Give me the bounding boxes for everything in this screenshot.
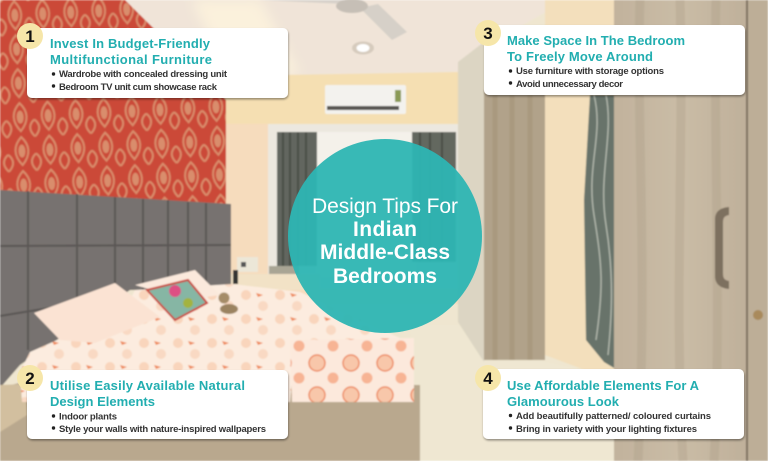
card 2: natural design elements: [17, 365, 288, 439]
ceiling: [125, 0, 567, 100]
bullets 1: Bedroom TV unit cum showcase rack: [59, 82, 218, 93]
number badge 4: 4: [483, 369, 493, 388]
window sill: [269, 266, 299, 274]
white wardrobe side: [458, 42, 484, 362]
large wardrobe door: [614, 0, 747, 461]
ceiling fan: [258, 0, 407, 40]
decorative cushion: [147, 280, 207, 320]
bullets 3: Avoid unnecessary decor: [516, 79, 623, 90]
wardrobe handle: [715, 207, 729, 289]
heading 4: Glamourous Look: [507, 394, 620, 409]
bed base: [0, 380, 420, 461]
bullets 1: Wardrobe with concealed dressing unit: [59, 69, 228, 80]
bullets 2: Indoor plants: [59, 412, 117, 422]
patterned curtain: [584, 95, 614, 368]
card 3: make space: [475, 20, 745, 95]
bullets 4: [509, 411, 711, 435]
bedside table: [0, 384, 27, 432]
heading 3: Make Space In The Bedroom: [507, 33, 685, 48]
left curtain: [277, 132, 317, 266]
ceiling cove light: [192, 0, 300, 75]
heading 4: Use Affordable Elements For A: [507, 378, 700, 393]
number badge 4: [475, 365, 501, 391]
wood wardrobe panel: [484, 90, 545, 360]
card 1: multifunctional furniture: [17, 23, 288, 98]
window sheer: [316, 132, 416, 277]
bullets 2: Style your walls with nature-inspired wallpapers: [59, 424, 266, 435]
heading 2: Utilise Easily Available Natural: [50, 378, 245, 393]
downlight: [352, 42, 374, 54]
heading 2: [50, 378, 245, 409]
air conditioner: [325, 85, 406, 114]
number badge 2: [17, 365, 43, 391]
wall niche: [545, 0, 615, 372]
bed foot panel: [290, 338, 414, 402]
bed pillow: [34, 283, 160, 343]
bullets 4: Add beautifully patterned/ coloured curtains: [516, 411, 711, 422]
teddy bear: [218, 292, 238, 314]
number badge 1: [17, 23, 43, 49]
bullets 2: [52, 412, 266, 435]
red damask wallpaper: [0, 0, 226, 210]
heading 3: To Freely Move Around: [507, 49, 653, 64]
back pillow: [135, 270, 220, 300]
floor: [410, 325, 614, 461]
number badge 1: 1: [25, 27, 35, 46]
centre title circle: Middle-Class: [320, 241, 450, 264]
bed sheet: [20, 284, 415, 402]
heading 1: Invest In Budget-Friendly: [50, 36, 211, 51]
bullets 1: [52, 69, 228, 93]
bullets 4: Bring in variety with your lighting fixtures: [516, 424, 697, 435]
heading 3: [507, 33, 685, 64]
door knob: [753, 310, 763, 320]
heading 4: [507, 378, 700, 409]
heading 2: Design Elements: [50, 394, 155, 409]
centre title circle: Design Tips For: [312, 195, 458, 218]
right curtain: [412, 132, 456, 262]
card 4: affordable elements: [475, 365, 744, 439]
number badge 2: 2: [25, 369, 35, 388]
bullets 3: Use furniture with storage options: [516, 66, 664, 77]
upper wall: [224, 72, 458, 124]
cream wall below window: [230, 274, 320, 290]
wardrobe edge strip: [747, 0, 768, 461]
heading 1: [50, 36, 212, 67]
centre title circle: [288, 139, 482, 333]
lower wall: [224, 124, 458, 304]
number badge 3: [475, 20, 501, 46]
window recess: [268, 124, 458, 289]
number badge 3: 3: [483, 24, 493, 43]
heading 1: Multifunctional Furniture: [50, 52, 212, 67]
headboard: [0, 190, 231, 388]
switch panel: [233, 257, 258, 284]
centre title circle: Indian: [353, 218, 417, 241]
bullets 3: [509, 66, 664, 90]
centre title circle: Bedrooms: [333, 265, 437, 288]
